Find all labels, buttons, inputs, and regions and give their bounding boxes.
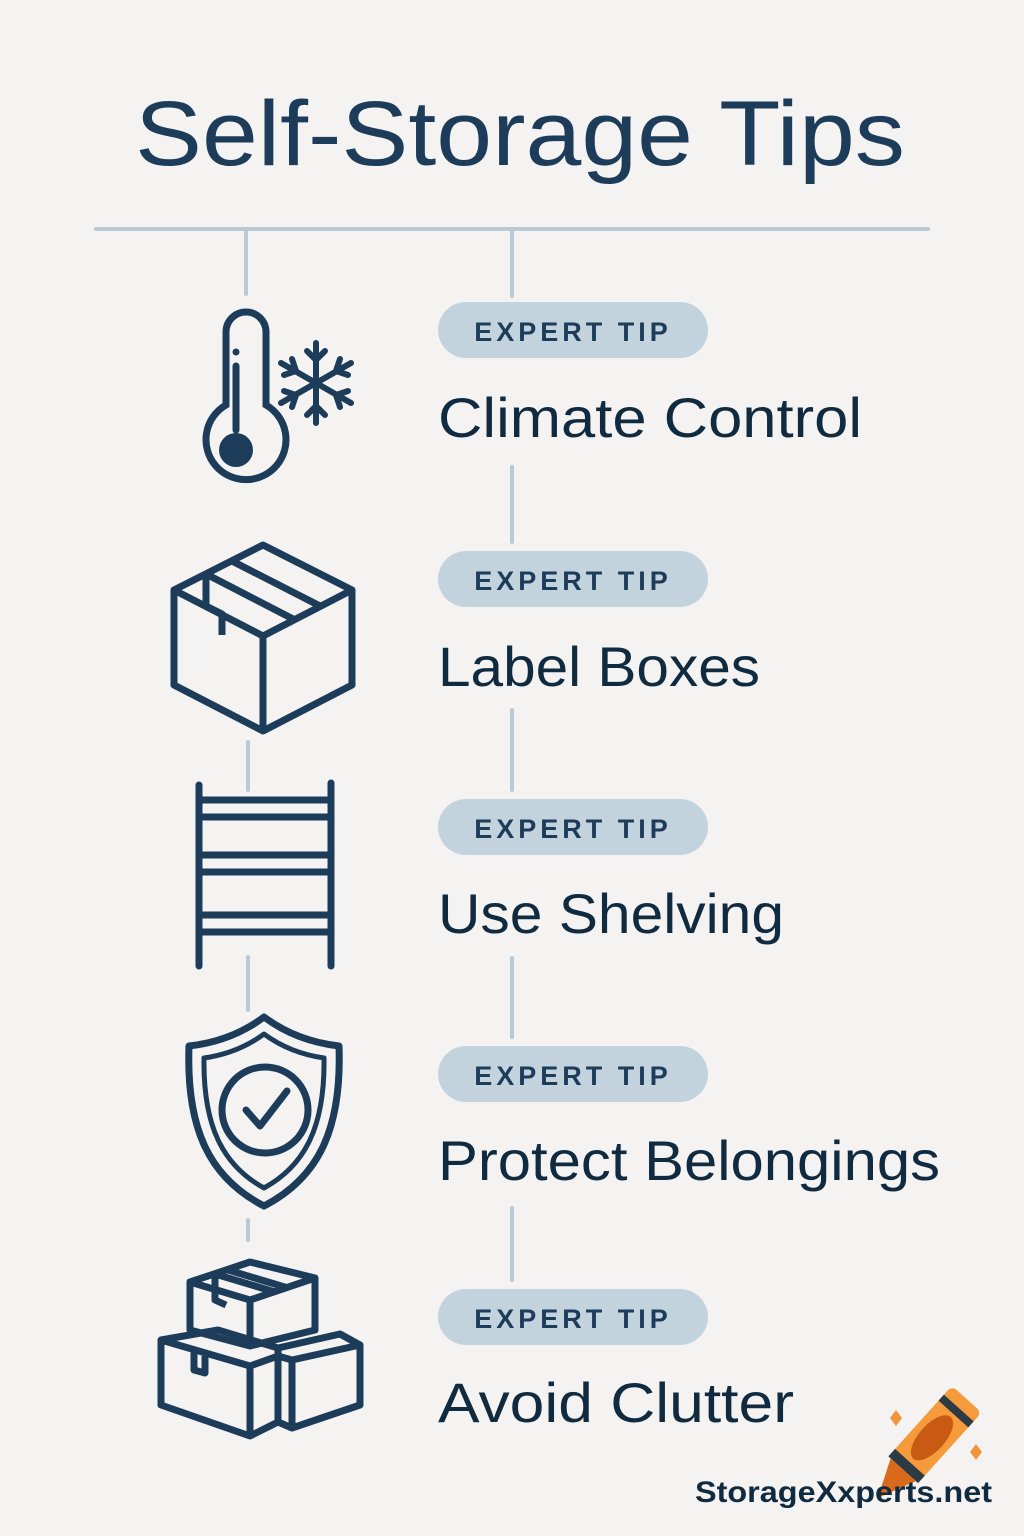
icon: thermometer with snowflake xyxy=(206,312,351,480)
heading: Climate Control xyxy=(438,386,862,449)
tip 2: label boxes xyxy=(174,545,760,731)
pill: expert tip xyxy=(438,1046,708,1102)
pill: expert tip xyxy=(438,302,708,358)
heading: Avoid Clutter xyxy=(438,1371,794,1434)
pill: expert tip: EXPERT TIP xyxy=(474,814,672,844)
logo text: StorageXxperts.net xyxy=(695,1476,992,1509)
title: Self-Storage Tips xyxy=(135,83,905,185)
pill: expert tip: EXPERT TIP xyxy=(474,1304,672,1334)
heading: Protect Belongings xyxy=(438,1129,940,1192)
pill: expert tip: EXPERT TIP xyxy=(474,1061,672,1091)
pill: expert tip: EXPERT TIP xyxy=(474,317,672,347)
tip 1: climate control xyxy=(206,302,862,480)
icon: shield with check xyxy=(189,1017,339,1206)
logo: crayon xyxy=(863,1386,982,1511)
tip 3: shelving xyxy=(199,783,784,966)
pill: expert tip xyxy=(438,799,708,855)
pill: expert tip xyxy=(438,551,708,607)
tip 4: protect belongings xyxy=(189,1017,940,1206)
pill: expert tip xyxy=(438,1289,708,1345)
icon: stacked boxes xyxy=(161,1262,360,1436)
heading: Label Boxes xyxy=(438,635,760,698)
icon: shelving xyxy=(199,783,331,966)
pill: expert tip: EXPERT TIP xyxy=(474,566,672,596)
heading: Use Shelving xyxy=(438,882,784,945)
tip 5: avoid clutter xyxy=(161,1262,794,1436)
icon: box xyxy=(174,545,352,731)
